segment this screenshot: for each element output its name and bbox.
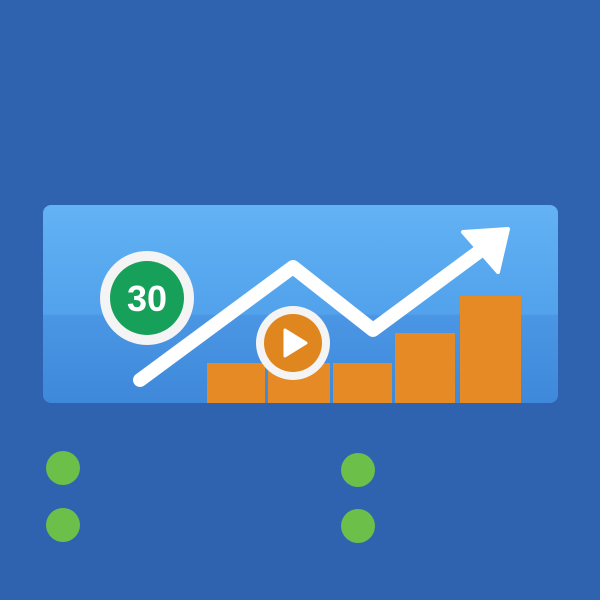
- icon: green dots: [46, 451, 375, 543]
- arrow: trend line: [140, 229, 508, 380]
- icon: 30 badge: [100, 251, 194, 345]
- icon: 30 badge: 30: [127, 278, 167, 319]
- panel: chart card: [43, 205, 558, 403]
- icon: play button: [256, 306, 330, 380]
- bar chart: [207, 296, 521, 403]
